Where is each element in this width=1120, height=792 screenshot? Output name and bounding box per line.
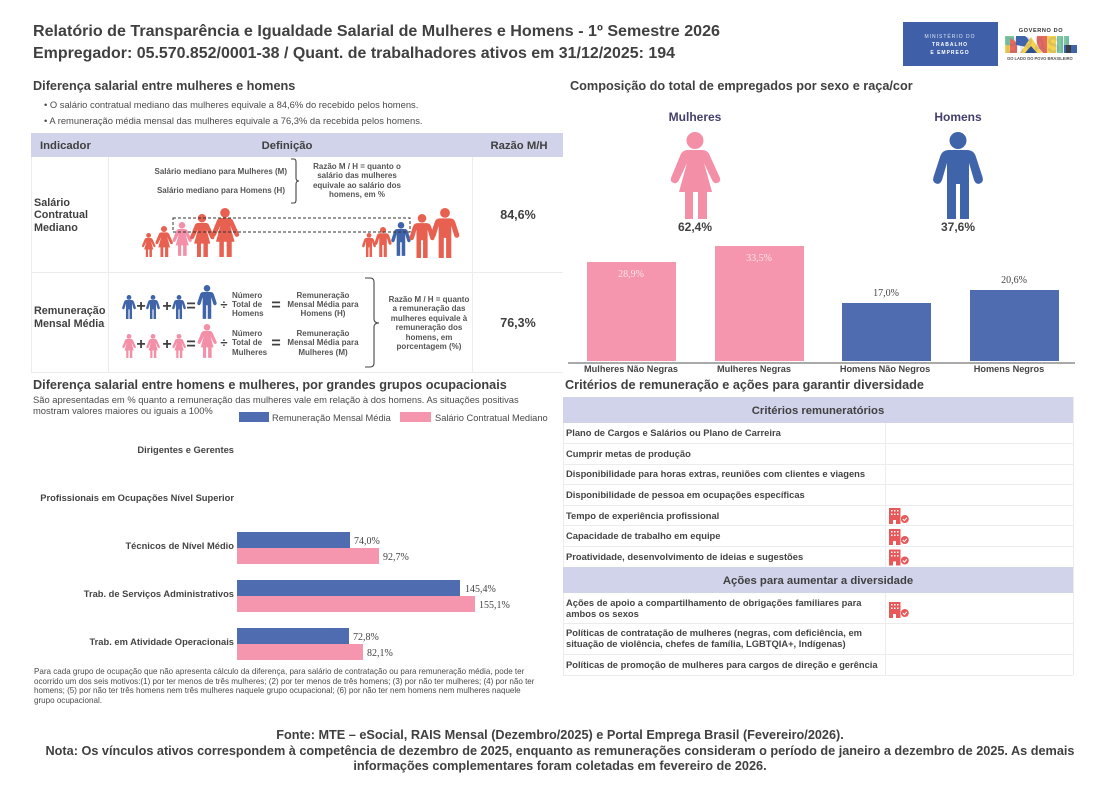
text block: descrição: São apresentadas em % quanto a remuneração das mulheres vale em relação à dos homens. As situações positivas	[33, 394, 519, 405]
table: critérios remuneratórios	[563, 397, 1073, 562]
icon: homens 37,6%: Homens	[934, 110, 982, 124]
bar chart: grupos ocupacionais: Dirigentes e Gerentes	[137, 445, 234, 455]
formula: mulheres: =	[186, 336, 196, 353]
logo: ministério do trabalho e emprego: E EMPREGO	[930, 50, 970, 56]
table: ações para diversidade: Ações de apoio a compartilhamento de obrigações familiares para	[566, 598, 862, 608]
formula: homens: Mensal Média para	[287, 300, 359, 309]
definition labels: Salário mediano para Homens (H)	[157, 186, 285, 195]
formula: homens: Número	[232, 291, 262, 300]
bar chart: grupos ocupacionais: Profissionais em Ocupações Nível Superior	[40, 493, 234, 503]
row label: Mediano	[34, 222, 78, 234]
text block: resumo: • A remuneração média mensal das mulheres equivale a 76,3% da recebida pelos homens.	[44, 115, 423, 126]
footer: fonte e nota: Fonte: MTE – eSocial, RAIS Mensal (Dezembro/2025) e Portal Emprega Brasil (Fevereiro/2026).	[276, 728, 844, 742]
icons: men by salary	[362, 208, 459, 258]
row label: Contratual	[34, 209, 88, 221]
formula: homens: Homens	[232, 309, 264, 318]
table: critérios remuneratórios: Proatividade, desenvolvimento de ideias e sugestões	[566, 552, 803, 562]
row label	[34, 305, 106, 330]
text block: nota do gráfico: grupo ocupacional.	[34, 696, 102, 705]
icon: building check	[889, 602, 909, 618]
bar chart: sexo e raça/cor: Homens Não Negros	[840, 364, 930, 374]
formula: homens: +	[136, 298, 146, 315]
bar chart: sexo e raça/cor: 28,9%	[618, 269, 644, 280]
logo: governo do brasil	[1005, 28, 1077, 61]
brace and explanation: homens, em	[406, 333, 452, 342]
icon: mulheres 62,4%: 62,4%	[678, 220, 712, 234]
table header: Definição	[262, 140, 313, 152]
title	[33, 23, 720, 62]
heading: critérios: Critérios de remuneração e ações para garantir diversidade	[565, 378, 924, 392]
formula: mulheres: Total de	[232, 338, 263, 347]
table: ações para diversidade: situação de violência, chefes de família, LGBTQIA+, Indígenas)	[566, 639, 846, 649]
table: ações para diversidade: Políticas de contratação de mulheres (negras, com deficiência, em	[566, 628, 862, 638]
panel: composição	[568, 79, 1075, 374]
heading: grupos ocupacionais: Diferença salarial entre homens e mulheres, por grandes grupos ocupacionais	[33, 378, 507, 392]
table: ações para diversidade	[563, 567, 1073, 670]
text block: nota do gráfico: Para cada grupo de ocupação que não apresenta cálculo da diferença, para salário de contratação ou para remuneração média, pode ter	[34, 667, 525, 676]
table header	[31, 133, 563, 157]
bar chart: grupos ocupacionais: 74,0%	[354, 536, 380, 547]
logo: governo do brasil: GOVERNO DO	[1019, 28, 1063, 34]
formula: mulheres: +	[136, 336, 146, 353]
table header: Razão M/H	[490, 140, 548, 152]
bar chart: sexo e raça/cor: Mulheres Não Negras	[584, 364, 678, 374]
bar chart: grupos ocupacionais: 72,8%	[353, 632, 379, 643]
text block: nota do gráfico	[34, 667, 535, 705]
panel: diferença salarial	[31, 79, 563, 372]
bar chart: grupos ocupacionais	[40, 445, 510, 660]
table: critérios remuneratórios: Disponibilidade para horas extras, reuniões com clientes e viagens	[566, 469, 865, 479]
bar chart: sexo e raça/cor: 17,0%	[873, 288, 899, 299]
median dashed box	[173, 218, 410, 232]
definition labels: Razão M / H = quanto o	[313, 162, 401, 171]
logo: ministério do trabalho e emprego: TRABALHO	[932, 42, 968, 48]
table: ações para diversidade: Ações para aumentar a diversidade	[723, 575, 913, 587]
bar chart: sexo e raça/cor: Mulheres Negras	[717, 364, 791, 374]
legend: Remuneração Mensal Média	[272, 413, 392, 423]
formula: homens: Total de	[232, 300, 263, 309]
icons: women by salary	[142, 208, 239, 257]
formula: homens: =	[271, 297, 281, 314]
footer: fonte e nota: informações complementares foram coletadas em fevereiro de 2026.	[353, 759, 767, 773]
formula: homens: =	[186, 298, 196, 315]
formula: mulheres: Mulheres (M)	[298, 348, 348, 357]
row: remuneração mensal média	[34, 278, 536, 367]
table: critérios remuneratórios: Tempo de experiência profissional	[566, 511, 719, 521]
brace and explanation: a remuneração das	[393, 304, 466, 313]
table: ações para diversidade: Políticas de promoção de mulheres para cargos de direção e gerência	[566, 660, 878, 670]
formula: mulheres: ÷	[220, 335, 228, 350]
legend	[239, 412, 548, 423]
definition labels	[155, 159, 402, 203]
bar chart: sexo e raça/cor: Homens Negros	[974, 364, 1044, 374]
text block: resumo	[44, 99, 423, 126]
table: critérios remuneratórios: Cumprir metas de produção	[566, 449, 691, 459]
formula: mulheres: Número	[232, 329, 262, 338]
table header: Indicador	[40, 140, 91, 152]
logo: governo do brasil: BRASIL	[1005, 32, 1077, 58]
panel: grupos ocupacionais	[33, 378, 548, 705]
definition labels: salário das mulheres	[317, 171, 397, 180]
icon: building check	[889, 550, 909, 566]
brace and explanation: mulheres equivale à	[391, 314, 468, 323]
value: 84,6%: 84,6%	[500, 208, 536, 222]
value: 76,3%: 76,3%	[500, 316, 536, 330]
bar chart: sexo e raça/cor: 33,5%	[746, 253, 772, 264]
heading: diferença salarial: Diferença salarial entre mulheres e homens	[33, 79, 295, 93]
text block: nota do gráfico: homens; (5) por não ter três homens nem três mulheres naquele grupo ocupacional; (6) por não ter nem homens nem mulheres naquele	[34, 686, 521, 695]
brace and explanation	[365, 278, 469, 367]
logo: governo do brasil: DO LADO DO POVO BRASILEIRO	[1007, 56, 1074, 61]
formula: homens: Remuneração	[297, 291, 350, 300]
legend: Salário Contratual Mediano	[435, 413, 548, 423]
icon: mulheres 62,4%	[669, 110, 722, 234]
text block: descrição: mostram valores maiores ou iguais a 100%	[33, 405, 213, 416]
icon: homens 37,6%: 37,6%	[941, 220, 975, 234]
icon: homens 37,6%	[933, 110, 983, 234]
definition labels: homens, em %	[329, 190, 385, 199]
bar chart: grupos ocupacionais: 145,4%	[465, 584, 496, 595]
title: Empregador: 05.570.852/0001-38 / Quant. de trabalhadores ativos em 31/12/2025: 194	[33, 45, 675, 62]
heading: composição: Composição do total de empregados por sexo e raça/cor	[570, 79, 913, 93]
row label: Mensal Média	[34, 318, 105, 330]
icon: mulheres 62,4%: Mulheres	[669, 110, 722, 124]
table: critérios remuneratórios: Capacidade de trabalho em equipe	[566, 531, 720, 541]
bar chart: grupos ocupacionais: Técnicos de Nível Médio	[125, 541, 234, 551]
logo: ministério do trabalho e emprego	[903, 22, 998, 66]
row label: Remuneração	[34, 305, 106, 317]
bar chart: sexo e raça/cor	[568, 246, 1075, 374]
text block: descrição	[33, 394, 519, 416]
formula: homens: +	[162, 298, 172, 315]
bar chart: grupos ocupacionais: Trab. em Atividade Operacionais	[89, 637, 234, 647]
table: ações para diversidade: ambos os sexos	[566, 609, 639, 619]
bar chart: grupos ocupacionais: 92,7%	[383, 552, 409, 563]
formula: mulheres	[122, 324, 359, 358]
brace and explanation: Razão M / H = quanto	[389, 295, 469, 304]
brace and explanation: remuneração dos	[396, 323, 463, 332]
formula: mulheres: Mulheres	[232, 348, 268, 357]
definition labels: equivale ao salário dos	[313, 181, 402, 190]
definition labels: Salário mediano para Mulheres (M)	[155, 167, 287, 176]
formula: mulheres: Remuneração	[297, 329, 350, 338]
row: salário contratual mediano	[34, 159, 536, 258]
text block: nota do gráfico: ocorrido um dos seis motivos:(1) por ter menos de três mulheres; (2) por ter menos de três homens; (3) por não ter mulheres; (4) por não ter	[34, 677, 535, 686]
table: critérios remuneratórios: Plano de Cargos e Salários ou Plano de Carreira	[566, 428, 782, 438]
row label	[34, 197, 88, 234]
logo: ministério do trabalho e emprego: MINISTÉRIO DO	[924, 33, 976, 40]
formula: mulheres: Mensal Média para	[287, 338, 359, 347]
panel: critérios de remuneração	[563, 378, 1074, 676]
table: critérios remuneratórios: Disponibilidade de pessoa em ocupações específicas	[566, 490, 805, 500]
formula: homens	[122, 285, 359, 319]
bar chart: sexo e raça/cor: 20,6%	[1001, 275, 1027, 286]
footer: fonte e nota: Nota: Os vínculos ativos correspondem à competência de dezembro de 2025, enquanto as remunerações consideram o período de janeiro a dezembro de 2025. As demais	[46, 744, 1074, 758]
formula: homens: ÷	[220, 297, 228, 312]
table: critérios remuneratórios: Critérios remuneratórios	[752, 405, 884, 417]
title: Relatório de Transparência e Igualdade Salarial de Mulheres e Homens - 1º Semestre 2026	[33, 23, 720, 40]
formula: homens: Homens (H)	[301, 309, 346, 318]
text block: resumo: • O salário contratual mediano das mulheres equivale a 84,6% do recebido pelos homens.	[44, 99, 418, 110]
bar chart: grupos ocupacionais: 82,1%	[367, 648, 393, 659]
bar chart: grupos ocupacionais: 155,1%	[479, 600, 510, 611]
icon: building check	[889, 508, 909, 524]
brace and explanation: porcentagem (%)	[397, 342, 462, 351]
icon: building check	[889, 529, 909, 545]
footer: fonte e nota	[46, 728, 1074, 773]
formula: mulheres: +	[162, 336, 172, 353]
bar chart: grupos ocupacionais: Trab. de Serviços Administrativos	[84, 589, 234, 599]
row label: Salário	[34, 197, 70, 209]
formula: mulheres: =	[271, 335, 281, 352]
